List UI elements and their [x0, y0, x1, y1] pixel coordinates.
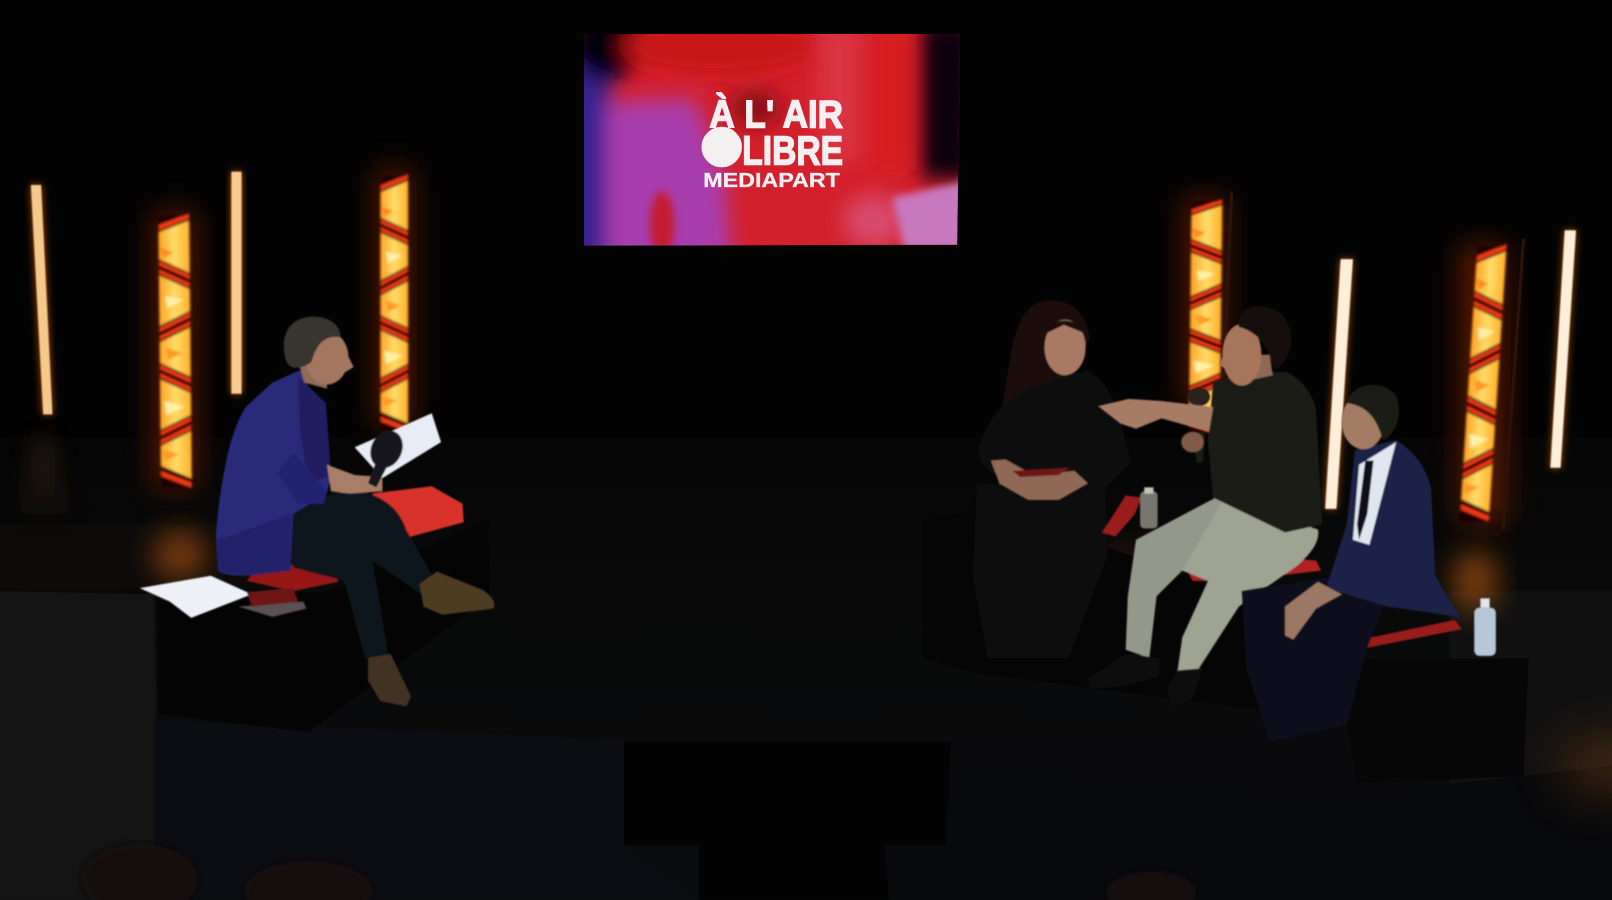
water bottle	[1140, 487, 1158, 528]
floor light reflections	[19, 437, 1612, 791]
microphone	[364, 425, 409, 487]
logo: À l'air libre Mediapart: MEDIAPART	[703, 169, 840, 192]
logo: À l'air libre Mediapart: LIBRE	[742, 127, 843, 173]
LED pillar far right	[1460, 244, 1507, 522]
light tube 1	[31, 185, 52, 414]
hands	[1285, 582, 1342, 639]
light tube 2	[231, 172, 242, 394]
sleeve	[278, 452, 327, 504]
neck	[1239, 355, 1273, 382]
tie	[1357, 461, 1373, 540]
microphone	[1181, 388, 1210, 463]
handheld notes	[355, 413, 441, 478]
light pillars: orange glow	[154, 170, 1506, 522]
hair	[284, 317, 340, 368]
suit jacket	[1326, 440, 1460, 617]
pointing arm	[1098, 399, 1213, 432]
audience heads	[82, 844, 1197, 900]
person: man in suit on the right	[1242, 385, 1496, 742]
boots	[419, 572, 494, 615]
seating cube right	[1336, 658, 1529, 783]
red bag	[1102, 496, 1141, 537]
notes on cube	[140, 576, 252, 618]
hair	[1002, 300, 1090, 406]
red cloth	[1347, 620, 1462, 648]
seating cube left	[157, 519, 490, 732]
water bottle	[1474, 598, 1496, 656]
forearm	[327, 465, 382, 493]
hair	[1239, 306, 1291, 370]
far leg	[1126, 493, 1249, 658]
person: woman on the right	[973, 300, 1158, 658]
face	[1045, 320, 1086, 375]
top	[978, 370, 1131, 491]
person: man speaking in the centre	[1088, 306, 1322, 707]
front stage box	[624, 742, 951, 900]
legs	[293, 491, 437, 658]
face and head	[1342, 394, 1385, 449]
seating cube centre	[922, 509, 1336, 720]
LED pillar far left	[158, 213, 192, 488]
sweater	[1208, 372, 1322, 533]
panel: video screen	[584, 34, 960, 246]
logo: À l'air libre Mediapart: À L' AIR	[709, 92, 843, 136]
neck and face	[296, 355, 327, 389]
pillar frames	[1223, 191, 1524, 529]
person: host on the left	[140, 317, 494, 706]
light tube 4	[1550, 230, 1576, 468]
red folded stack	[372, 486, 464, 539]
floor	[0, 437, 1612, 900]
LED pillar right	[1189, 199, 1222, 436]
hands	[991, 460, 1088, 500]
trousers	[1242, 576, 1388, 742]
logo: À l'air libre Mediapart	[702, 92, 843, 192]
light tube 3	[1325, 259, 1353, 509]
red cloth under host	[247, 561, 338, 591]
near leg	[1177, 499, 1318, 673]
shoes	[1088, 654, 1160, 689]
face	[1222, 324, 1261, 386]
white shirt	[1353, 442, 1396, 545]
trousers	[973, 483, 1108, 658]
jacket	[216, 370, 331, 576]
LED pillar left	[380, 174, 408, 433]
red cloth	[1182, 555, 1321, 581]
